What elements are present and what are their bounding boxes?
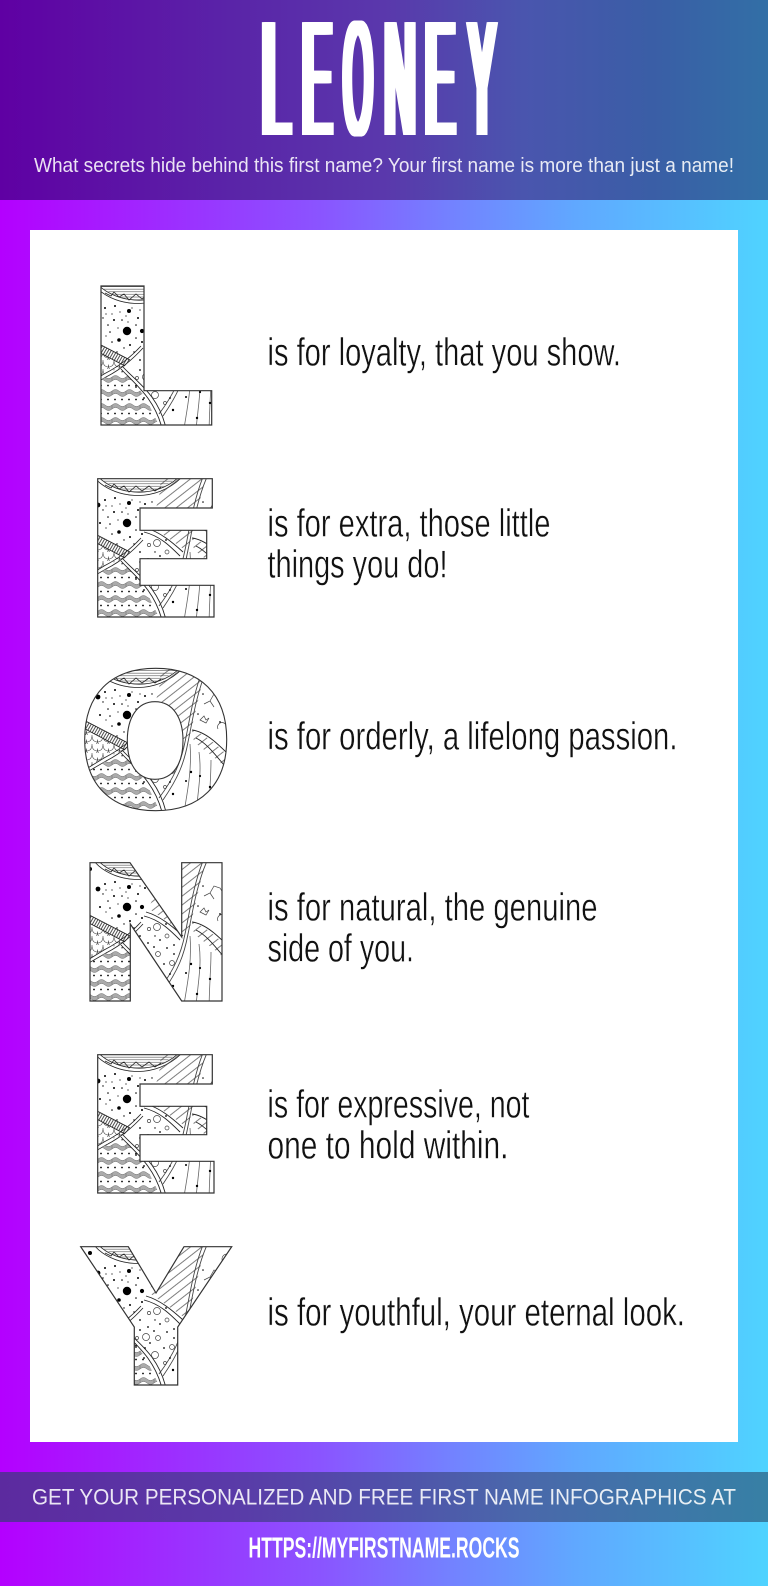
header band xyxy=(0,0,768,200)
text: letter E line: is for extra, those little xyxy=(268,503,550,546)
text: letter N line: is for natural, the genuine xyxy=(268,887,598,930)
icon: patterned letter L xyxy=(100,285,212,426)
panel: letters and lines xyxy=(80,285,682,1386)
icon: patterned letter E second xyxy=(97,1054,215,1194)
text: second letter E line: is for expressive, not xyxy=(268,1084,530,1127)
footer call to action: GET YOUR PERSONALIZED AND FREE FIRST NAME INFOGRAPHICS AT xyxy=(32,1484,736,1510)
icon: patterned letter O xyxy=(84,668,228,812)
text: letter E line: things you do! xyxy=(268,544,448,586)
text: letter N line xyxy=(268,887,598,971)
footer url: HTTPS://MYFIRSTNAME.ROCKS xyxy=(248,1533,520,1565)
text: second letter E line xyxy=(268,1084,530,1167)
text: letter L line: is for loyalty, that you show. xyxy=(268,332,621,375)
panel: white content card xyxy=(30,230,738,1442)
title xyxy=(262,0,498,170)
icon: patterned letter N xyxy=(89,862,223,1002)
icon: patterned letter E xyxy=(97,478,215,618)
subtitle: What secrets hide behind this first name? Your first name is more than just a name! xyxy=(34,155,734,177)
footer band xyxy=(0,1472,768,1522)
icon: patterned letter Y xyxy=(80,1246,233,1386)
text: second letter E line: one to hold within. xyxy=(268,1124,508,1167)
text: letter E line xyxy=(268,503,550,586)
text: letter N line: side of you. xyxy=(268,928,414,971)
